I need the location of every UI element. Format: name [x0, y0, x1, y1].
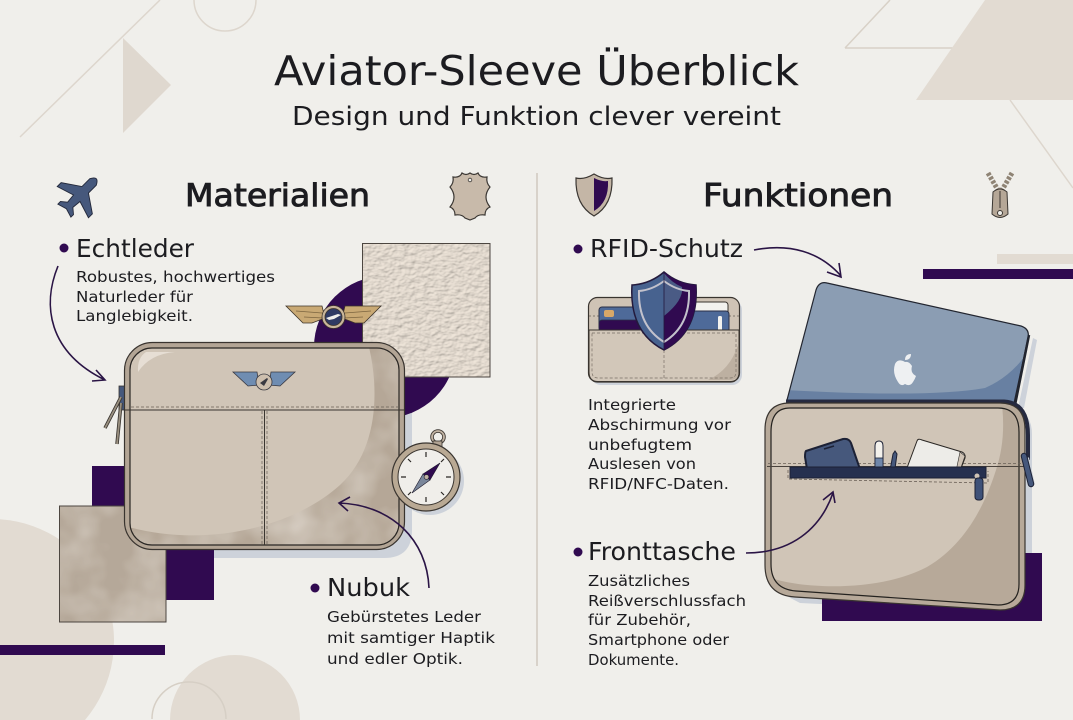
illustration: wallet with shield: [588, 272, 742, 385]
arrow: Nubuk to sleeve: [339, 497, 429, 588]
bullet: [60, 244, 68, 252]
icon: RFID shield: [632, 272, 696, 350]
icon: leather hide: [450, 173, 490, 220]
icon: sleeve wings: [233, 372, 295, 390]
description: Langlebigkeit.: [76, 307, 193, 325]
swatch: Nubuk texture: [60, 506, 166, 622]
panel: Funktionen: [574, 173, 1042, 669]
description: Naturleder für: [76, 288, 194, 306]
sleeve body: [124, 342, 404, 550]
swatch: Echtleder texture: [362, 244, 490, 377]
description: Robustes, hochwertiges: [76, 268, 275, 286]
icon: half shield: [576, 174, 612, 216]
seams: [125, 409, 404, 411]
illustration: open sleeve with laptop: [765, 283, 1042, 621]
icon: zipper: [988, 173, 1012, 218]
seam: [767, 466, 1024, 468]
sleeve top zipper: [786, 402, 1028, 460]
text block: RFID description: Auslesen von: [588, 455, 696, 473]
bullet: [574, 244, 582, 254]
title: Aviator-Sleeve Überblick: [274, 47, 799, 95]
description: für Zubehör,: [588, 611, 691, 629]
description: [76, 268, 275, 325]
decoration: purple circle and squares: [92, 276, 456, 600]
callout: Nubuk: [310, 573, 495, 668]
label: Fronttasche: [588, 537, 736, 566]
label: Echtleder: [76, 234, 195, 263]
cards: [690, 302, 728, 330]
apple logo: [894, 354, 916, 385]
laptop: [785, 283, 1037, 410]
icon: gold pilot wings: [286, 306, 381, 328]
side zipper pull: [1026, 458, 1032, 485]
description: [588, 572, 746, 669]
pocket zipper: [790, 467, 986, 478]
wallet back: [588, 298, 740, 382]
text block: RFID description: RFID/NFC-Daten.: [588, 475, 729, 493]
bullet: [574, 548, 582, 556]
pen and stylus: [875, 441, 883, 475]
arrow: Fronttasche to pocket: [746, 492, 835, 553]
heading: Funktionen: Funktionen: [703, 178, 893, 214]
description: Dokumente.: [588, 651, 679, 669]
description: Smartphone oder: [588, 631, 730, 649]
notebook: [904, 439, 965, 476]
text block: RFID description: Integrierte: [588, 396, 676, 414]
description: mit samtiger Haptik: [327, 629, 495, 647]
wallet front pocket: [589, 330, 739, 382]
heading: Materialien: Materialien: [185, 178, 370, 214]
smartphone: [805, 439, 862, 475]
text block: RFID description: unbefugtem: [588, 436, 692, 454]
subtitle: Design und Funktion clever vereint: [292, 102, 781, 132]
sleeve shadow: [152, 350, 412, 558]
arrow: RFID to laptop: [754, 248, 841, 277]
label: RFID-Schutz: [590, 234, 743, 263]
icon: compass: [392, 431, 464, 515]
arrow: Echtleder to sleeve: [50, 266, 105, 381]
description: und edler Optik.: [327, 650, 463, 668]
sleeve zipper: [105, 386, 125, 444]
text block: RFID description: Abschirmung vor: [588, 416, 732, 434]
label: Nubuk: [327, 573, 411, 602]
callout: Fronttasche: [574, 537, 746, 669]
description: Zusätzliches: [588, 572, 690, 590]
center divider: [536, 173, 538, 666]
description: [327, 608, 495, 668]
panel: Materialien: [49, 163, 495, 668]
wallet shadow: [591, 300, 742, 385]
description: Reißverschlussfach: [588, 592, 746, 610]
callout: RFID-Schutz: [574, 234, 743, 263]
decoration: purple rectangle: [822, 553, 1042, 621]
icon: airplane: [49, 163, 112, 226]
callout: Echtleder: [60, 234, 275, 325]
bullet: [310, 584, 320, 592]
text block: RFID description: [588, 396, 732, 493]
sleeve shadow: [775, 409, 1032, 614]
description: Gebürstetes Leder: [327, 608, 482, 626]
illustration: sleeve with echtleder and nubuk: [105, 342, 404, 550]
sleeve body: [765, 403, 1025, 610]
